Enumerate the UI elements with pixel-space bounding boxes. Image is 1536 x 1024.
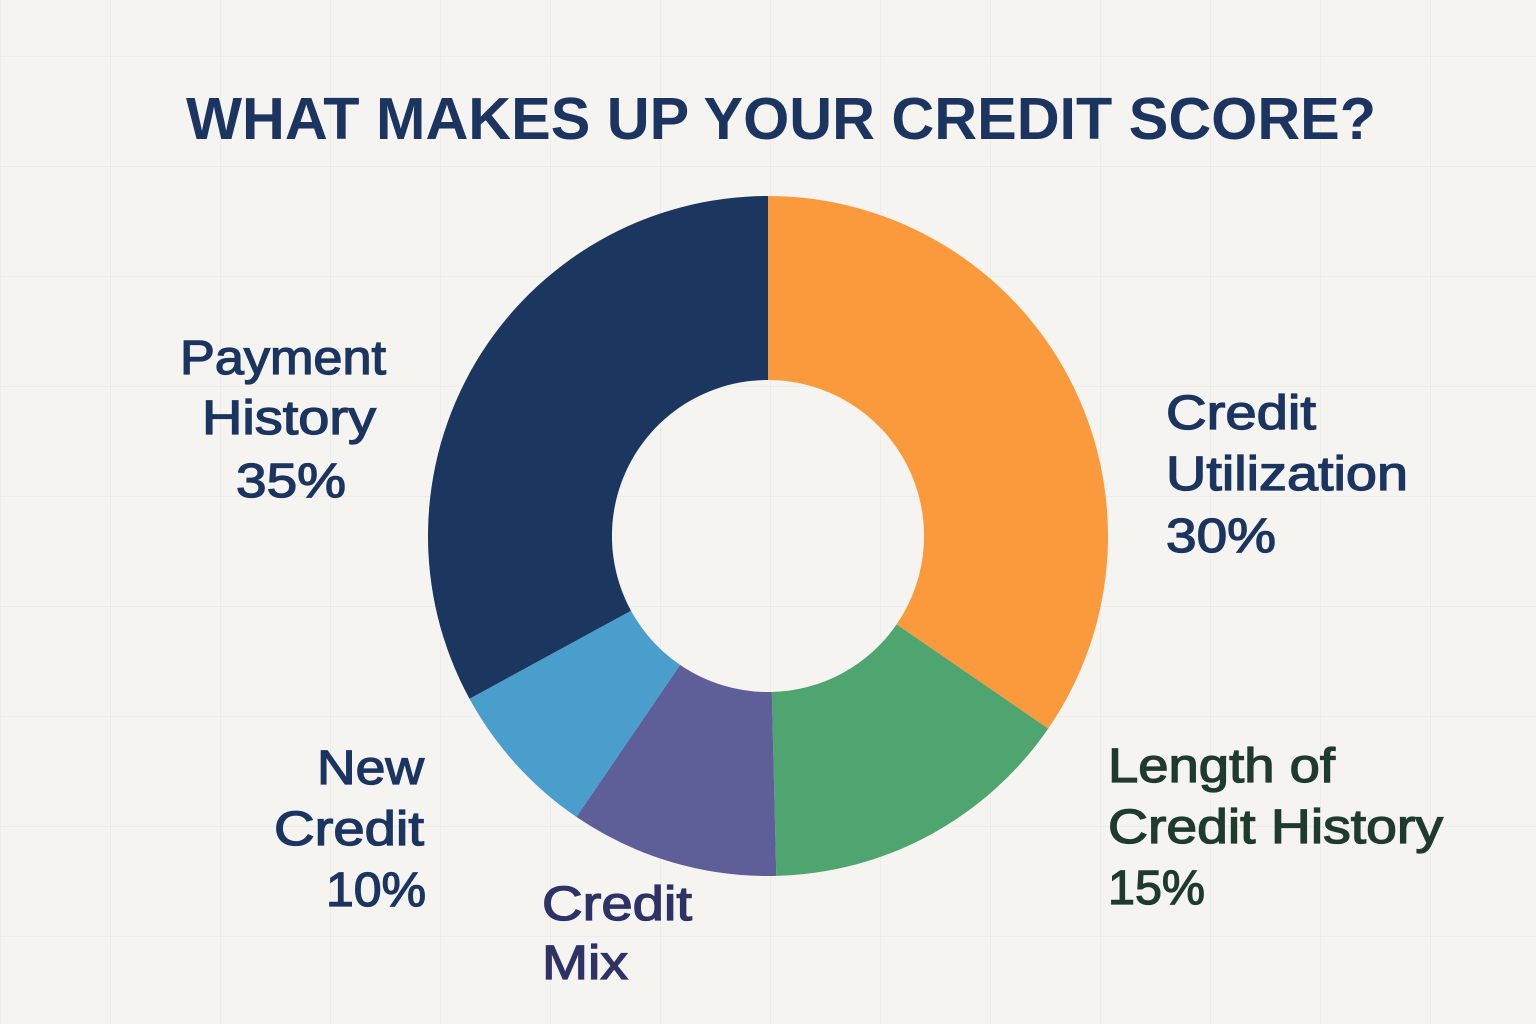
label: credit utilization: 30% <box>1166 510 1276 563</box>
segment: length of credit history <box>772 624 1048 876</box>
label: credit utilization: Utilization <box>1166 448 1408 501</box>
label: new credit: 10% <box>326 864 426 917</box>
label: payment history: Payment <box>180 332 386 385</box>
donut chart <box>428 196 1108 876</box>
label: new credit: New <box>317 742 424 795</box>
label: credit mix <box>542 878 692 990</box>
label: length of credit history <box>1108 740 1443 915</box>
label: length of credit history: Length of <box>1108 740 1336 793</box>
label: payment history: 35% <box>236 455 346 508</box>
label: new credit: Credit <box>274 803 424 856</box>
label: payment history: History <box>202 392 376 445</box>
label: credit utilization <box>1166 387 1408 563</box>
segment: new credit <box>470 611 680 817</box>
label: credit mix: Credit <box>542 878 692 931</box>
label: payment history <box>180 332 386 508</box>
segment: credit mix <box>576 665 776 876</box>
segment: credit utilization <box>768 196 1108 729</box>
label: new credit <box>274 742 426 917</box>
label: credit utilization: Credit <box>1166 387 1316 440</box>
label: length of credit history: Credit History <box>1108 801 1443 854</box>
title: WHAT MAKES UP YOUR CREDIT SCORE? <box>186 86 1376 152</box>
label: credit mix: Mix <box>542 937 628 990</box>
label: length of credit history: 15% <box>1108 862 1205 915</box>
segment: payment history <box>428 196 768 699</box>
